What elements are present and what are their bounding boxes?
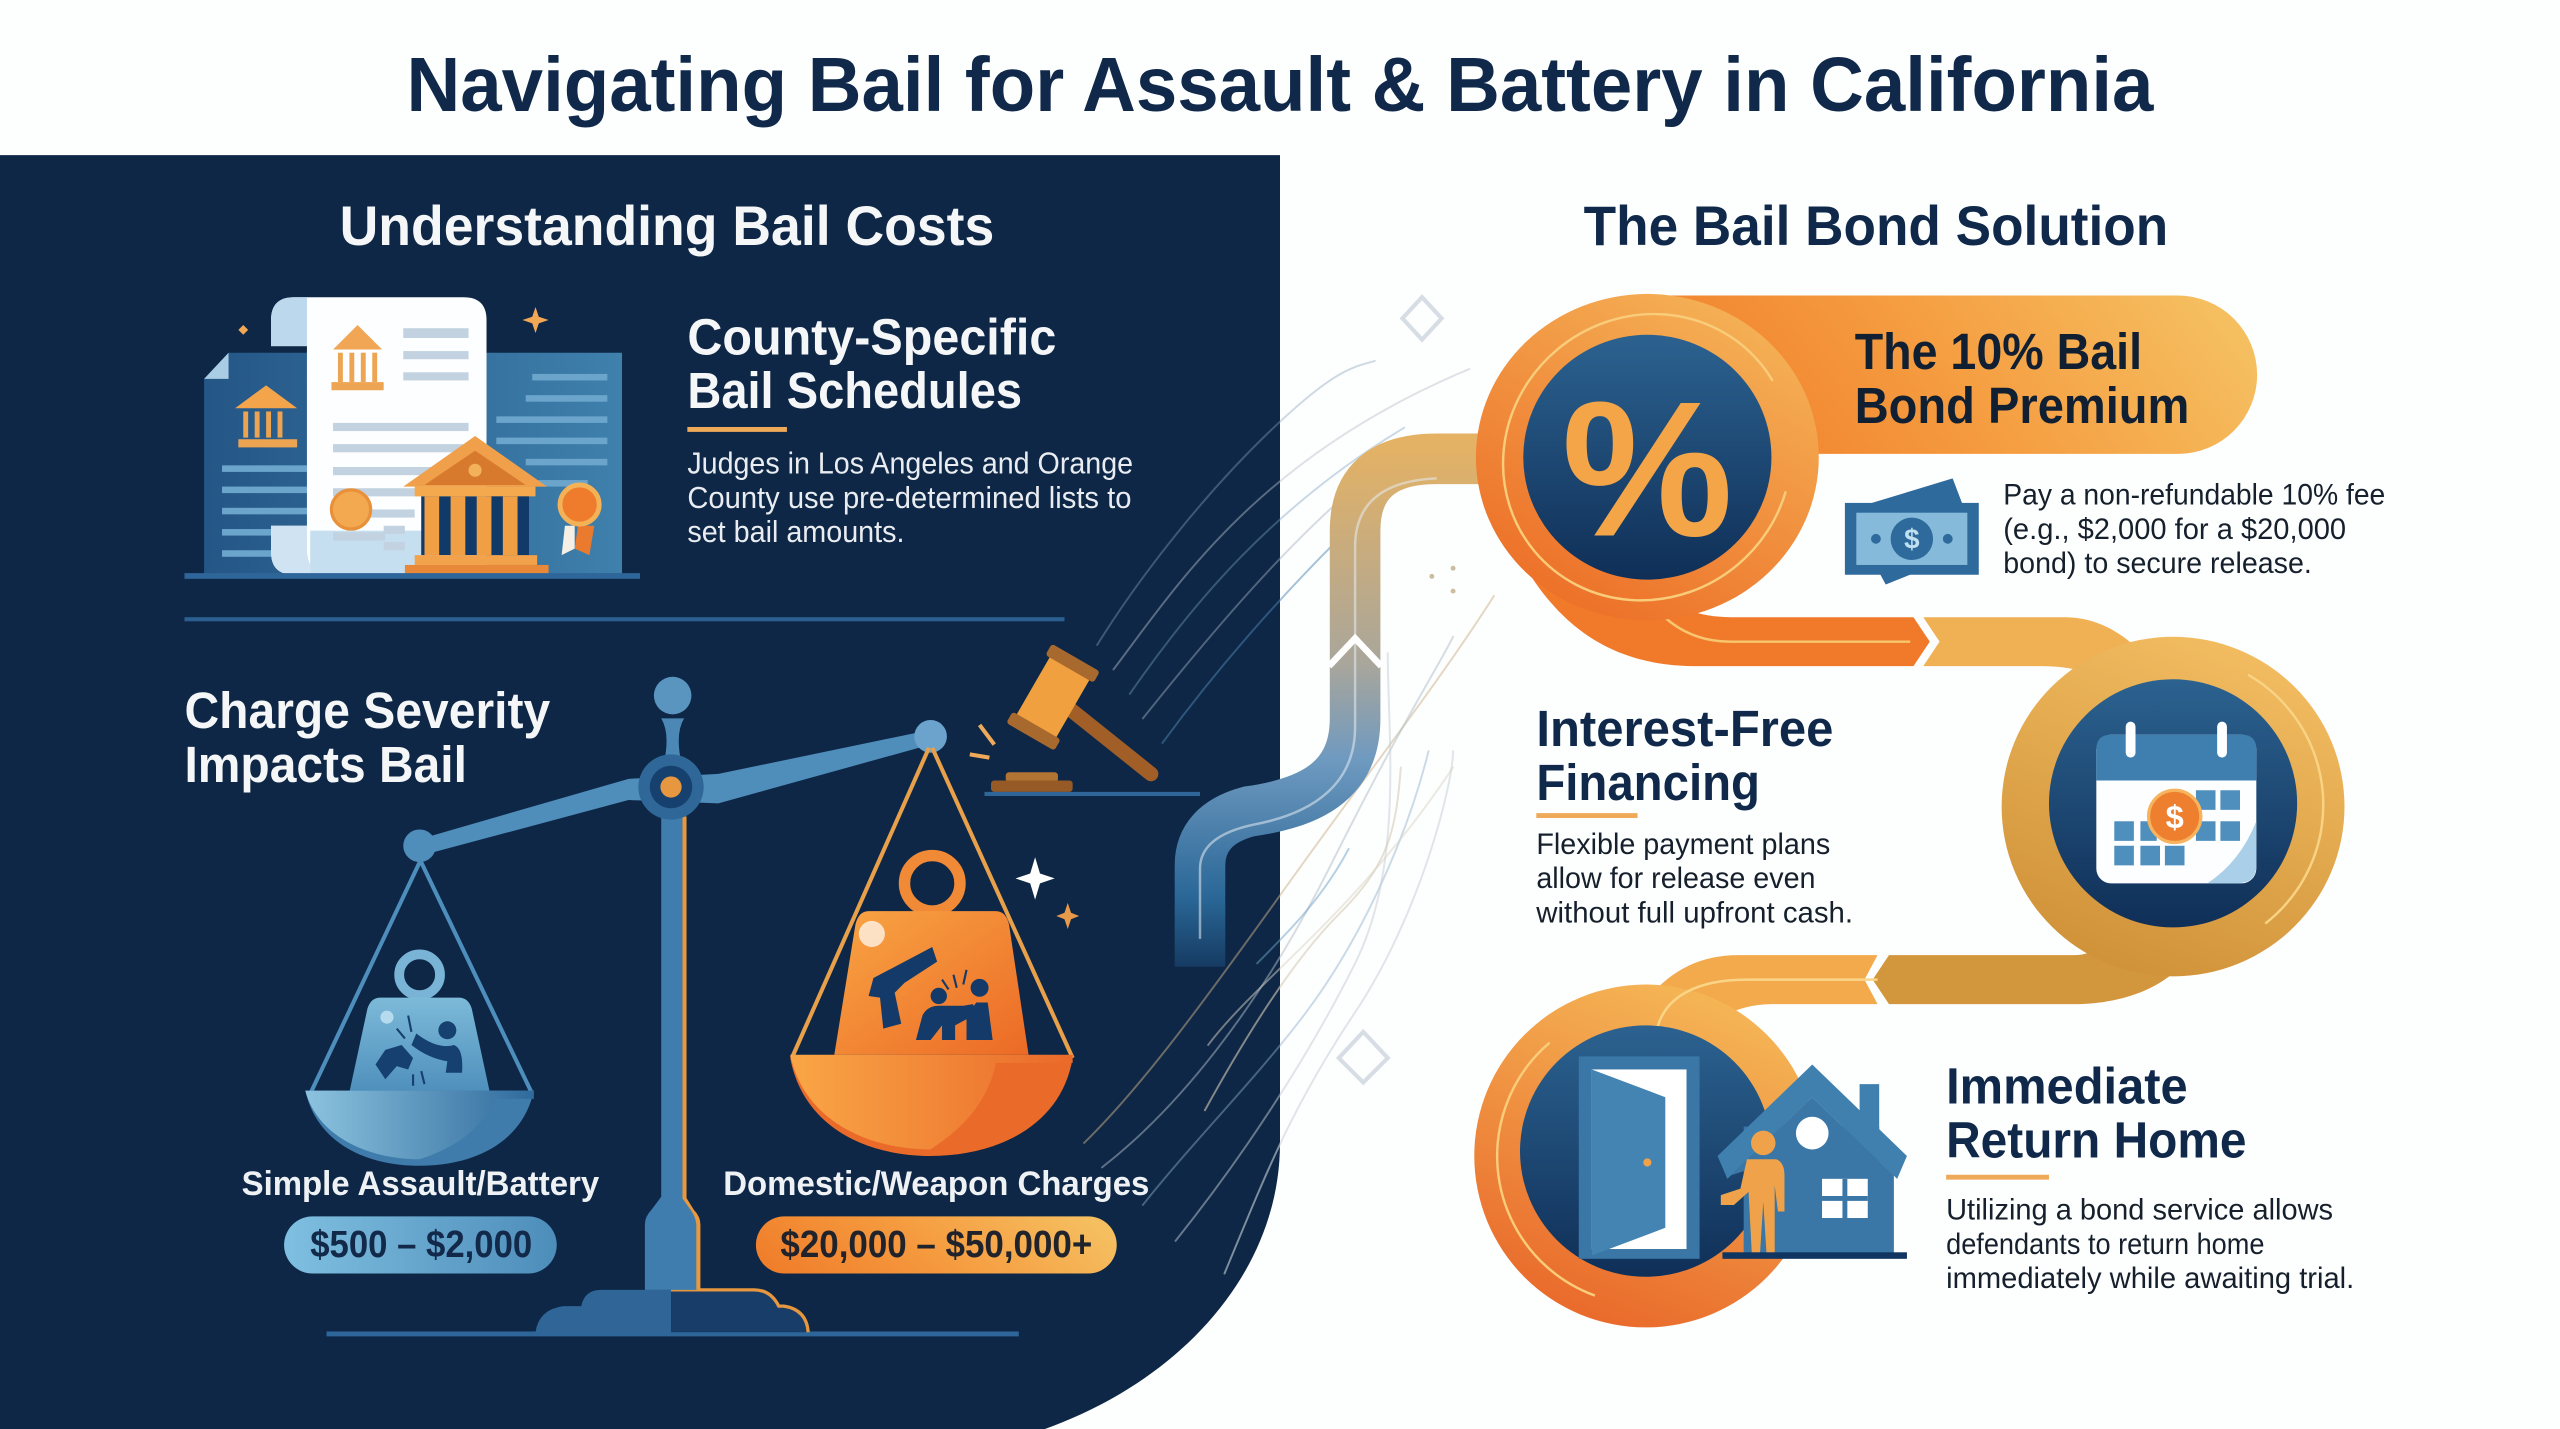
text: return home description <box>1946 1194 2354 1295</box>
text: financing description: without full upfront cash. <box>1535 897 1853 930</box>
percent symbol: % <box>1562 362 1733 577</box>
arrow: winding path from costs to solution <box>1200 459 1510 967</box>
heading: charge severity impacts bail <box>184 682 550 793</box>
text: county schedules description: Judges in Los Angeles and Orange <box>687 448 1133 481</box>
heading: 10% premium: The 10% Bail <box>1855 323 2142 380</box>
text: financing description: Flexible payment plans <box>1536 828 1830 861</box>
pill: simple assault amount <box>284 1216 557 1274</box>
step 2: interest-free financing heading <box>1536 700 1833 811</box>
text: premium description: Pay a non-refundable 10% fee <box>2003 479 2385 512</box>
pill: domestic weapon amount: $20,000 – $50,000+ <box>780 1223 1092 1265</box>
decorative flowing lines <box>1084 361 1494 1274</box>
text: return home description: immediately while awaiting trial. <box>1946 1262 2354 1295</box>
heading: 10% premium <box>1855 323 2189 434</box>
heading: county-specific bail schedules: County-Specific <box>687 308 1056 365</box>
step 3: return home ring <box>1455 966 1907 1346</box>
step 2: interest-free financing heading: Interest-Free <box>1536 700 1833 757</box>
icon: light weight with simple assault <box>305 859 534 1166</box>
text: county schedules description: set bail amounts. <box>687 516 904 549</box>
left heading: Understanding Bail Costs <box>340 195 994 257</box>
text: financing description: allow for release even <box>1536 862 1816 895</box>
right heading: The Bail Bond Solution <box>1584 195 2168 257</box>
pill: domestic weapon amount <box>756 1216 1117 1274</box>
accent rule <box>687 427 787 432</box>
heading: county-specific bail schedules <box>687 308 1056 419</box>
icon: calendar <box>2096 722 2256 883</box>
icon: house and person <box>1718 1065 1907 1259</box>
icon: gavel <box>970 644 1200 796</box>
icon: documents and courthouse <box>184 297 640 579</box>
step 3: immediate return home heading: Return Home <box>1946 1112 2247 1169</box>
icon: calendar: $ <box>2166 798 2184 835</box>
title: Navigating Bail for Assault & Battery in California <box>407 43 2155 128</box>
text: return home description: defendants to return home <box>1946 1228 2264 1261</box>
icon: balance scale <box>327 677 1019 1336</box>
text: financing description <box>1535 828 1853 930</box>
text: county schedules description: County use pre-determined lists to <box>687 482 1131 515</box>
icon: heavy weight with weapon and domestic charges <box>790 748 1079 1156</box>
connector: gold band to home <box>1633 955 1878 1045</box>
step 2: interest-free financing heading: Financing <box>1536 754 1760 811</box>
icon: money: $ <box>1904 524 1920 555</box>
decorative diamonds and dots <box>1339 297 1456 1083</box>
panel: dark navy bail costs background <box>0 155 1280 1429</box>
heading: charge severity impacts bail: Charge Severity <box>184 682 550 739</box>
step 1: percent ring and premium pill <box>1445 255 2257 666</box>
label: simple assault battery: Simple Assault/Battery <box>242 1165 599 1203</box>
connector: gold band to calendar <box>1923 617 2158 694</box>
text: county schedules description <box>687 448 1133 549</box>
accent rule <box>1536 813 1638 818</box>
icon: money <box>1845 478 1979 585</box>
step 3: immediate return home heading: Immediate <box>1946 1058 2188 1115</box>
heading: county-specific bail schedules: Bail Schedules <box>687 362 1022 419</box>
text: premium description <box>2003 479 2385 580</box>
accent rule <box>1946 1175 2049 1180</box>
step 2: calendar ring <box>1968 600 2378 1010</box>
heading: charge severity impacts bail: Impacts Bail <box>184 736 467 793</box>
heading: 10% premium: Bond Premium <box>1855 377 2189 434</box>
text: premium description: bond) to secure release. <box>2003 547 2312 580</box>
label: domestic weapon charges: Domestic/Weapon Charges <box>723 1165 1149 1203</box>
connector: tan band from calendar <box>1873 914 2196 1004</box>
icon: open door <box>1579 1056 1700 1259</box>
text: return home description: Utilizing a bond service allows <box>1946 1194 2333 1227</box>
pill: simple assault amount: $500 – $2,000 <box>310 1223 532 1265</box>
text: premium description: (e.g., $2,000 for a $20,000 <box>2003 513 2346 546</box>
step 3: immediate return home heading <box>1946 1058 2247 1169</box>
